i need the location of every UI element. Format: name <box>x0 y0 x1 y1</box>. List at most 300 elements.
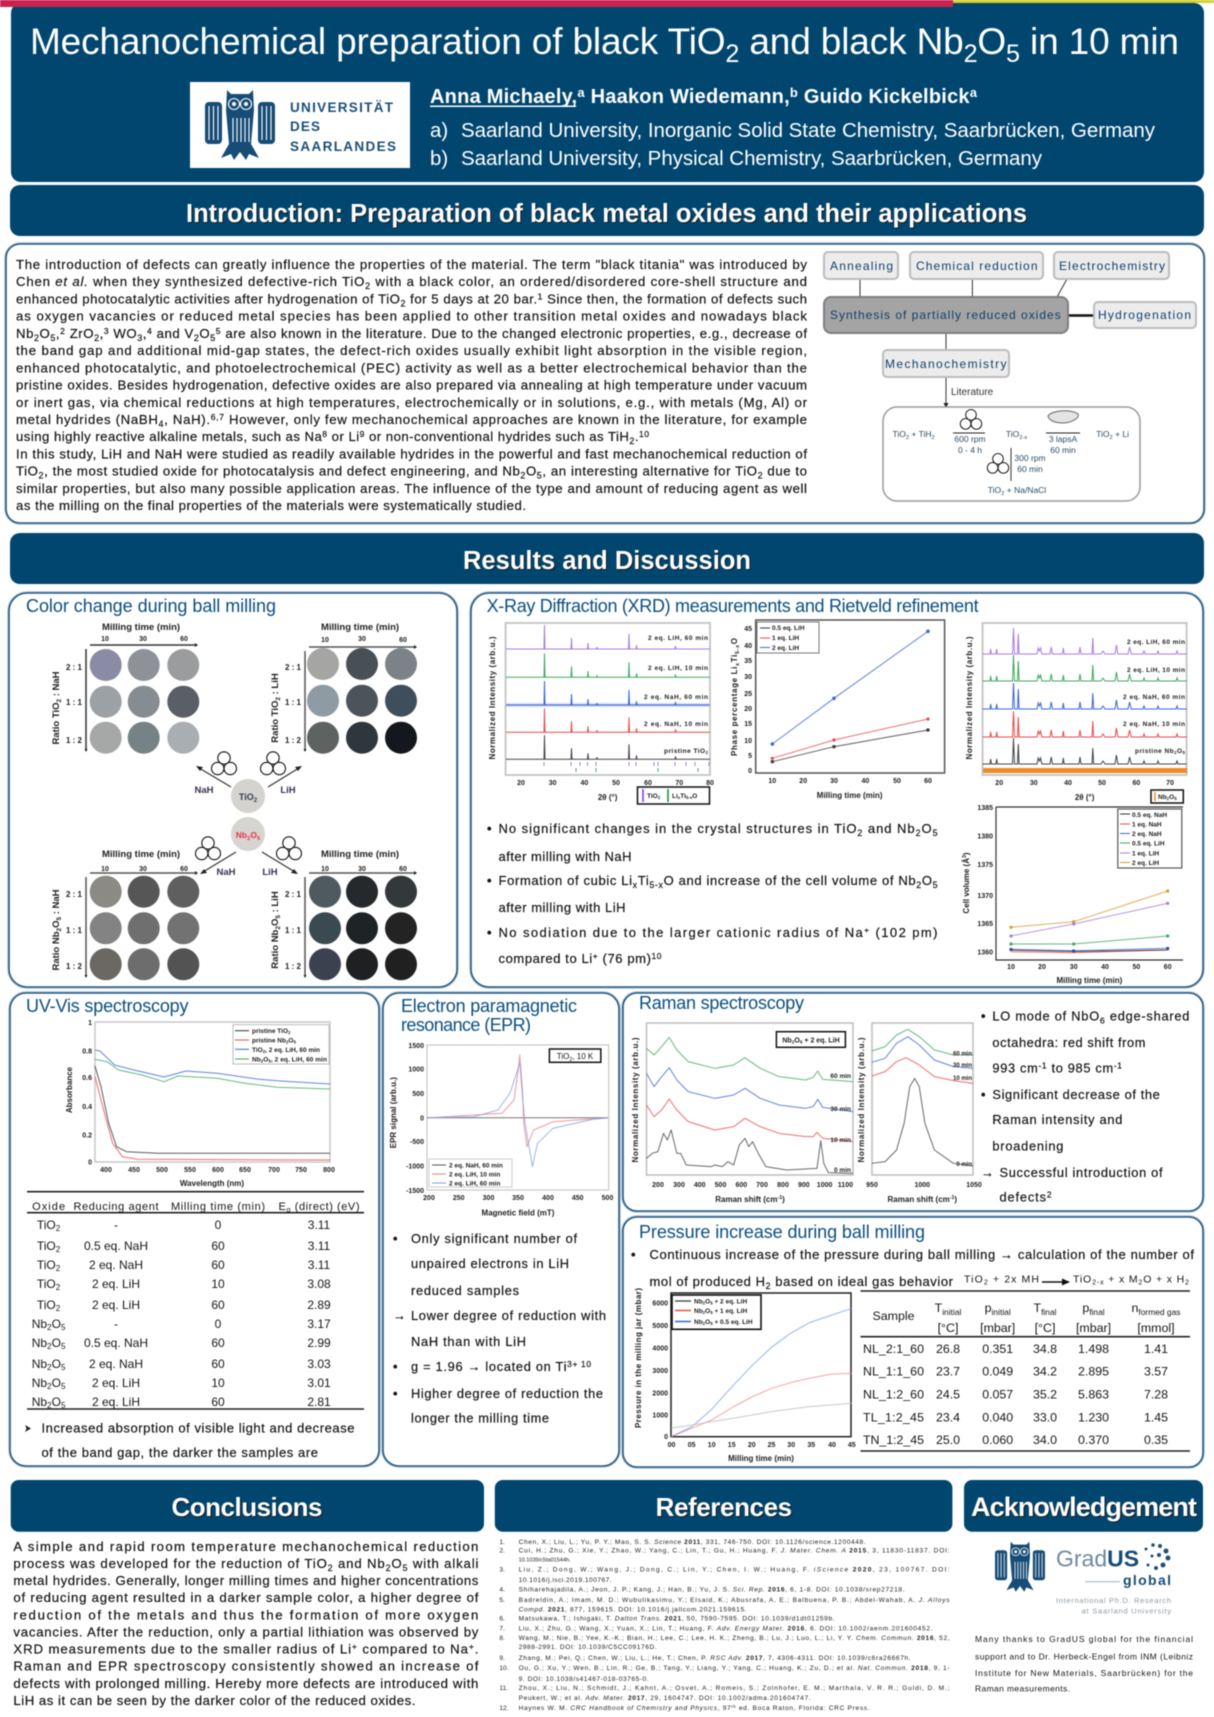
chart: EPR spectra: 1000 <box>408 1066 424 1073</box>
XRD findings: Formation of cubic LixTi5-xO and increase of the cell volume of Nb2O5 <box>498 873 938 890</box>
title: Mechanochemical preparation of black TiO2 and black Nb2O5 in 10 min <box>30 21 1179 68</box>
chart: absorbance spectra: 650 <box>239 1167 251 1174</box>
chart: cell volume: 1 eq. NaH <box>1132 822 1162 828</box>
reference list: Wang, M.; Nie, B.; Yee, K.-K.; Bian, H.; Lee, C.; Lee, H. K.; Zheng, B.; Lu, J.; Luo, L.; Li, Y. Y. Chem. Commun. 2016, 52, <box>519 1635 950 1642</box>
reference list: 7. <box>499 1626 505 1632</box>
table: band gaps: 60 <box>211 1239 225 1253</box>
pressure text: Continuous increase of the pressure during ball milling → calculation of the number of <box>650 1247 1194 1262</box>
chart: Raman spectra zoomed peak: Normalized Intensity (arb.u.) <box>857 1037 866 1162</box>
reference list: 9. DOI: 10.1038/s41467-018-03765-0. <box>519 1676 649 1683</box>
center: pristine samples and reaction arrows: TiO2 <box>239 792 258 804</box>
literature routes box: TiO2 + Na/NaCl <box>988 485 1046 497</box>
chart: absorbance spectra: 1 <box>88 1020 92 1027</box>
chart: pressure vs milling time: 1000 <box>652 1412 668 1420</box>
introduction text: or inert gas, via chemical reductions at high temperatures, electrochemically or in solutions, e.g., with metals (Mg, Al) or <box>16 395 808 410</box>
Raman findings: defects2 <box>1000 1190 1052 1205</box>
chart: Raman spectra zoomed peak: 950 <box>866 1182 878 1189</box>
literature routes box: 3 lapsA <box>1049 434 1078 444</box>
chart: cell volume: 10 <box>1007 964 1015 971</box>
table: pressure measurements: NL_1:1_60 <box>863 1364 924 1378</box>
chart: absorbance spectra: TiO2, 2 eq. LiH, 60 min <box>252 1047 320 1054</box>
reaction equation: TiO2-x + x M2O + x H2 <box>1073 1274 1189 1287</box>
chart: phase percentage vs milling time: 20 <box>744 706 752 713</box>
literature routes box <box>883 407 1140 501</box>
EPR findings: longer the milling time <box>411 1411 549 1426</box>
acknowledgement text: Raman measurements. <box>975 1684 1070 1694</box>
reference list: Compd. 2021, 877, 159615. DOI: 10.1016/j.jallcom.2021.159615. <box>519 1606 747 1614</box>
table: pressure measurements: pfinal <box>1082 1301 1105 1317</box>
panel: electron paramagnetic resonance <box>383 993 619 1466</box>
literature routes box: 300 rpm <box>1014 453 1046 463</box>
chart: cell volume: 2 eq. LiH <box>1132 860 1159 867</box>
reference list: 12. <box>499 1705 509 1712</box>
table: pressure measurements: NL_2:1_60 <box>863 1342 924 1356</box>
table: pressure measurements: 0.057 <box>982 1388 1013 1402</box>
introduction text: using highly reactive alkaline metals, such as Na8 or Li9 or non-conventional hydrides such as TiH2.10 <box>16 429 649 446</box>
table: pressure measurements: 23.4 <box>936 1410 960 1424</box>
Raman findings <box>981 1009 1189 1205</box>
chart: pressure vs milling time: 45 <box>848 1442 856 1449</box>
table: band gaps: Milling time (min) <box>171 1201 265 1213</box>
chart: cell volume: 1 eq. LiH <box>1132 850 1159 858</box>
section: conclusions: Conclusions <box>172 1492 322 1522</box>
reference list: 9. <box>499 1655 505 1662</box>
conclusions text: of reducing agent resulted in a darker sample color, a higher degree of <box>13 1590 479 1605</box>
reference list: Zhang, M.; Pei, Q.; Chen, W.; Liu, L.; He, T.; Chen, P. RSC Adv. 2017, 7, 4306-4311. DOI: 10.1039/c6ra26667h. <box>519 1655 911 1662</box>
flow diagram: routes to partially reduced oxides: Electrochemistry <box>1059 259 1165 273</box>
chart: TiO2 diffractograms: 60 <box>644 780 652 787</box>
logo: GradUS global: GradUS <box>1056 1546 1139 1572</box>
EPR findings: Higher degree of reduction the <box>411 1386 603 1401</box>
chart: absorbance spectra: 0.2 <box>82 1132 92 1140</box>
table: pressure measurements: 24.5 <box>936 1388 960 1402</box>
chart: phase percentage vs milling time: 0.5 eq. LiH <box>772 625 805 632</box>
table: pressure measurements: 5.863 <box>1078 1388 1109 1402</box>
chart: phase percentage vs milling time: 50 <box>893 778 901 785</box>
sample grid: TiO2 with NaH: 60 <box>180 636 188 643</box>
chart: absorbance spectra: 400 <box>100 1167 112 1174</box>
table: band gaps: 2 eq. LiH <box>92 1277 140 1291</box>
chart: EPR spectra <box>389 1043 613 1218</box>
table: pressure measurements: 33.0 <box>1033 1410 1057 1424</box>
sample grid: Nb2O5 with LiH: Ratio Nb2O5 : LiH <box>270 891 282 969</box>
reference list: Zhou, X.; Liu, N.; Schmidt, J.; Kahnt, A.; Osvet, A.; Romeis, S.; Zolnhofer, E. M.; Marthala, V. R. R.; Guldi, D. M.; <box>519 1685 950 1692</box>
flow diagram: routes to partially reduced oxides: Hydrogenation <box>1098 308 1191 322</box>
reference list: 2. <box>499 1548 505 1554</box>
table: pressure measurements: 1.41 <box>1144 1342 1168 1356</box>
chart: EPR spectra: 450 <box>572 1195 584 1202</box>
reference list: Peukert, W.; et al. Adv. Mater. 2017, 29, 1604747. DOI: 10.1002/adma.201604747. <box>519 1695 811 1702</box>
section: references <box>495 1480 952 1712</box>
chart: Raman spectra full range: 60 min <box>830 1073 851 1080</box>
chart: pressure vs milling time: 4000 <box>652 1346 668 1352</box>
center: pristine samples and reaction arrows: NaH <box>194 785 214 796</box>
chart: Raman spectra zoomed peak: 10 min <box>953 1076 972 1082</box>
chart: Raman spectra zoomed peak <box>857 1023 982 1204</box>
table: pressure measurements: [mbar] <box>1076 1321 1111 1335</box>
section: conclusions <box>11 1480 484 1708</box>
pressure text: • <box>631 1247 636 1262</box>
sample grid: TiO2 with NaH: 1 : 1 <box>66 698 83 707</box>
panel: color change during ball milling <box>9 593 457 987</box>
table: band gaps: 3.11 <box>308 1218 331 1232</box>
table: band gaps: 3.17 <box>307 1317 331 1331</box>
table: band gaps: - <box>114 1218 118 1232</box>
chart: pressure vs milling time: 0 <box>664 1434 668 1441</box>
chart: phase percentage vs milling time: 30 <box>744 674 752 681</box>
table: band gaps: 3.11 <box>308 1239 331 1253</box>
chart: pressure vs milling time: 05 <box>688 1442 696 1449</box>
table: pressure measurements: 34.8 <box>1033 1342 1057 1356</box>
EPR findings: Only significant number of <box>411 1231 577 1246</box>
reference list: 5. <box>499 1597 505 1604</box>
chart: EPR spectra: 250 <box>453 1195 465 1202</box>
chart: Raman spectra zoomed peak: 1050 <box>966 1182 982 1189</box>
flow diagram: routes to partially reduced oxides: Synthesis of partially reduced oxides <box>830 308 1061 322</box>
reference list: 10. <box>499 1665 509 1672</box>
reference list: 6. <box>499 1616 505 1622</box>
table: pressure measurements <box>860 1291 1190 1451</box>
Raman findings: octahedra: red shift from <box>992 1035 1145 1050</box>
chart: phase percentage vs milling time: 2 eq. LiH <box>772 645 799 652</box>
chart: cell volume: 0.5 eq. LiH <box>1132 840 1165 848</box>
chart: absorbance spectra: Wavelength (nm) <box>180 1179 244 1188</box>
chart: phase percentage vs milling time: 40 <box>862 778 869 785</box>
chart: EPR spectra: 2 eq. NaH, 60 min <box>449 1162 503 1170</box>
chart: pressure vs milling time: 2000 <box>652 1390 668 1398</box>
chart: absorbance spectra: 750 <box>295 1167 307 1174</box>
flow diagram: routes to partially reduced oxides: Mechanochemistry <box>885 357 1006 371</box>
chart: EPR spectra: 300 <box>483 1195 494 1202</box>
chart: cell volume: 1385 <box>977 805 993 812</box>
table: pressure measurements: pinitial <box>985 1301 1011 1317</box>
table: band gaps: TiO2 <box>37 1239 61 1254</box>
affiliations: a) <box>430 119 448 142</box>
logo: GradUS global: International Ph.D. Research <box>1056 1596 1171 1605</box>
reference list: 2988-2991. DOI: 10.1039/C5CC09176D. <box>519 1644 657 1651</box>
Raman findings: 993 cm-1 to 985 cm-1 <box>992 1061 1122 1076</box>
table: band gaps: 2.81 <box>307 1395 331 1409</box>
chart: absorbance spectra: 0.6 <box>82 1075 92 1082</box>
sample grid: TiO2 with LiH: 2 : 1 <box>285 663 302 672</box>
chart: cell volume: Milling time (min) <box>1057 976 1123 985</box>
chart: cell volume: 1365 <box>977 921 993 928</box>
literature routes box: 0 - 4 h <box>958 445 982 455</box>
chart: cell volume <box>962 805 1183 985</box>
Raman findings: • <box>981 1087 986 1102</box>
table: band gaps: 10 <box>211 1277 225 1291</box>
chart: Nb2O5 diffractograms: 60 <box>1133 780 1140 787</box>
table: band gaps: 2 eq. LiH <box>92 1395 140 1409</box>
flow diagram: routes to partially reduced oxides <box>824 252 1196 501</box>
XRD findings: • <box>487 925 492 940</box>
chart: Nb2O5 diffractograms: 2 eq. NaH, 60 min <box>1123 694 1185 701</box>
chart: Raman spectra zoomed peak: Raman shift (cm-1) <box>888 1195 957 1204</box>
chart: pressure vs milling time: 30 <box>787 1442 795 1449</box>
sample grid: Nb2O5 with LiH <box>270 849 417 980</box>
chart: EPR spectra: 200 <box>423 1195 435 1202</box>
table: pressure measurements: Tinitial <box>935 1301 962 1317</box>
chart: pressure vs milling time: 10 <box>708 1442 716 1449</box>
reference list: 1. <box>499 1539 505 1546</box>
table: band gaps: 0.5 eq. NaH <box>84 1239 148 1253</box>
chart: cell volume: 30 <box>1070 964 1078 971</box>
chart: TiO2 diffractograms: TiO2 <box>647 793 661 800</box>
XRD findings: compared to Li+ (76 pm)10 <box>498 951 662 966</box>
table: band gaps: Nb2O5 <box>32 1317 66 1332</box>
conclusions text: vacancies. After the reduction, only a partial lithiation was observed by <box>13 1624 479 1640</box>
reference list: 10.1016/j.isci.2019.100767. <box>519 1577 612 1584</box>
chart: absorbance spectra: 600 <box>212 1167 224 1174</box>
table: pressure measurements: 1.45 <box>1144 1410 1168 1424</box>
panel title: UV-Vis spectroscopy <box>26 996 188 1016</box>
introduction text: TiO2, the most studied oxide for photocatalysis and defect engineering, and Nb2O5, an interesting alternative for TiO2 due to <box>16 464 807 480</box>
table: band gaps: 2.89 <box>307 1298 331 1312</box>
chart: Raman spectra full range: 1000 <box>817 1182 832 1189</box>
chart: phase percentage vs milling time: 5 <box>748 753 752 760</box>
literature routes box: 600 rpm <box>954 434 986 444</box>
chart: Raman spectra zoomed peak: 30 min <box>953 1063 972 1069</box>
table: band gaps: Oxide <box>32 1201 65 1213</box>
chart: EPR spectra: 350 <box>512 1195 524 1202</box>
conclusions text <box>13 1539 479 1708</box>
panel title: X-Ray Diffraction (XRD) measurements and Rietveld refinement <box>487 596 979 616</box>
sample grid: Nb2O5 with LiH: 1 : 2 <box>285 962 302 971</box>
chart: Nb2O5 diffractograms: Normalized Intensity (arb.u.) <box>965 636 974 760</box>
chart: absorbance spectra: 450 <box>128 1167 140 1174</box>
chart: phase percentage vs milling time: 35 <box>744 658 752 665</box>
chart: pressure vs milling time: 20 <box>748 1442 756 1449</box>
chart: Raman spectra zoomed peak: 1000 <box>915 1182 930 1189</box>
XRD findings: • <box>487 821 492 836</box>
introduction text: as oxygen vacancies or reduced metal species has been applied to other transition metal oxides and nowadays black <box>16 308 807 324</box>
chart: EPR spectra: Magnetic field (mT) <box>482 1209 555 1218</box>
chart: cell volume: 2 eq. NaH <box>1132 831 1162 838</box>
chart: phase percentage vs milling time: 10 <box>768 778 776 785</box>
acknowledgement text: Many thanks to GradUS global for the financial <box>975 1634 1193 1644</box>
XRD findings: after milling with LiH <box>498 900 626 915</box>
sample grid: TiO2 with LiH <box>270 622 417 754</box>
table: pressure measurements: 35.2 <box>1033 1388 1057 1402</box>
section: acknowledgement <box>964 1480 1203 1694</box>
chart: absorbance spectra: 0 <box>88 1160 92 1166</box>
chart: EPR spectra: -500 <box>410 1139 424 1146</box>
sample grid: Nb2O5 with LiH: 30 <box>358 866 366 873</box>
chart: absorbance spectra: 700 <box>268 1167 280 1174</box>
chart: TiO2 diffractograms: 30 <box>549 780 557 787</box>
table: pressure measurements: 34.0 <box>1033 1433 1057 1447</box>
Raman findings: → <box>981 1165 994 1180</box>
table: band gaps: 60 <box>211 1298 225 1312</box>
chart: Raman spectra full range: 600 <box>735 1182 747 1189</box>
table: pressure measurements: 7.28 <box>1144 1388 1168 1402</box>
chart: phase percentage vs milling time: Phase percentage LixTi5-xO <box>730 638 741 756</box>
UV-Vis conclusion <box>25 1421 354 1460</box>
sample grid: TiO2 with NaH: Ratio TiO2 : NaH <box>51 671 63 745</box>
chart: EPR spectra: 2 eq. LiH, 10 min <box>449 1172 500 1178</box>
sample grid: TiO2 with NaH: 10 <box>101 636 109 643</box>
chart: TiO2 diffractograms: 2θ (°) <box>598 793 618 802</box>
conclusions text: LiH as it can be seen by the darker color of the reduced oxides. <box>13 1693 415 1708</box>
XRD findings: No sodiation due to the larger cationic radius of Na+ (102 pm) <box>498 925 938 940</box>
XRD findings <box>487 821 938 966</box>
panel: pressure increase during ball milling <box>623 1217 1203 1467</box>
table: pressure measurements: 0.060 <box>982 1433 1013 1447</box>
chart: Raman spectra full range: 0 min <box>834 1167 851 1174</box>
reference list: 3. <box>499 1566 505 1574</box>
chart: absorbance spectra: 0.4 <box>82 1104 92 1111</box>
chart: pressure vs milling time: 25 <box>768 1442 775 1449</box>
table: pressure measurements: 0.351 <box>982 1342 1013 1356</box>
chart: pressure vs milling time: 6000 <box>652 1300 668 1308</box>
chart: EPR spectra: -1000 <box>406 1164 424 1171</box>
chart: pressure vs milling time: 35 <box>807 1442 815 1449</box>
reference list: Matsukawa, T.; Ishigaki, T. Dalton Trans. 2021, 50, 7590-7595. DOI: 10.1039/d1dt01259b. <box>519 1616 835 1622</box>
chart: TiO2 diffractograms: LixTi5-xO <box>672 793 697 800</box>
table: band gaps: Eg (direct) (eV) <box>278 1201 360 1214</box>
panel title: Color change during ball milling <box>26 596 276 616</box>
introduction text: enhanced photocatalytic, and photoelectrochemical (PEC) activity as well as a better electrochemical behavior than the <box>16 360 807 376</box>
reference list <box>499 1539 950 1712</box>
section: acknowledgement: Acknowledgement <box>971 1492 1197 1522</box>
table: pressure measurements: nformed gas <box>1131 1301 1181 1317</box>
EPR findings: → <box>393 1308 406 1323</box>
table: pressure measurements: NL_1:2_60 <box>863 1388 924 1402</box>
introduction text: Chen et al. when they synthesized defective-rich TiO2 with a black color, an ordered/disordered core-shell structure and <box>16 274 807 291</box>
chart: pressure vs milling time: 3000 <box>652 1368 668 1375</box>
EPR findings <box>393 1231 606 1426</box>
chart: Raman spectra full range: Normalized Intensity (arb.u.) <box>631 1037 640 1162</box>
acknowledgement text: support and to Dr. Herbeck-Engel from INM (Leibniz <box>975 1651 1193 1661</box>
chart: absorbance spectra: 550 <box>184 1167 196 1174</box>
chart: Nb2O5 diffractograms: 20 <box>995 780 1003 787</box>
chart: phase percentage vs milling time: 25 <box>744 691 752 698</box>
chart: Raman spectra full range <box>631 1023 853 1204</box>
XRD findings: No significant changes in the crystal structures in TiO2 and Nb2O5 <box>498 821 938 838</box>
chart: TiO2 diffractograms: Normalized Intensity (arb.u.) <box>488 636 497 760</box>
sample grid: TiO2 with NaH: 30 <box>139 636 147 643</box>
table: band gaps: 2 eq. LiH <box>92 1376 140 1390</box>
chart: cell volume: 40 <box>1101 964 1109 971</box>
table: pressure measurements: Sample <box>872 1309 915 1323</box>
sample grid: TiO2 with LiH: 10 <box>321 637 329 644</box>
table: band gaps: 0.5 eq. NaH <box>84 1336 148 1350</box>
table: band gaps: Nb2O5 <box>32 1357 66 1372</box>
table: band gaps: Reducing agent <box>74 1201 158 1213</box>
reference list: 11. <box>499 1685 508 1692</box>
chart: absorbance spectra: pristine TiO2 <box>252 1028 291 1035</box>
Raman findings: • <box>981 1009 986 1024</box>
affiliations: b) <box>430 147 448 170</box>
chart: EPR spectra: EPR signal (arb.u.) <box>389 1077 398 1148</box>
table: band gaps: 0 <box>215 1317 222 1331</box>
chart: pressure vs milling time <box>634 1288 856 1463</box>
table: band gaps: 10 <box>211 1376 225 1390</box>
table: pressure measurements: 3.57 <box>1144 1364 1168 1378</box>
chart: phase percentage vs milling time: 10 <box>744 738 752 745</box>
conclusions text: XRD measurements due to the smaller radius of Li+ compared to Na+. <box>13 1641 478 1656</box>
chart: pressure vs milling time: 5000 <box>652 1323 668 1330</box>
table: band gaps: TiO2 <box>37 1218 61 1233</box>
chart: cell volume: 1370 <box>977 893 993 900</box>
chart: pressure vs milling time: Nb2O5 + 2 eq. LiH <box>694 1298 747 1306</box>
sample grid: TiO2 with LiH: 30 <box>358 636 366 643</box>
table: pressure measurements: 0.049 <box>982 1364 1013 1378</box>
Raman findings: Raman intensity and <box>992 1112 1122 1127</box>
chart: cell volume: 0.5 eq. NaH <box>1132 812 1167 819</box>
acknowledgement text: Institute for New Materials, Saarbrücken) for the <box>975 1668 1193 1678</box>
affiliations: Saarland University, Inorganic Solid State Chemistry, Saarbrücken, Germany <box>461 119 1156 142</box>
section bar: results and discussion: Results and Discussion <box>463 547 751 575</box>
chart: absorbance spectra: 500 <box>156 1167 168 1174</box>
sample grid: TiO2 with LiH: 60 <box>399 637 407 644</box>
chart: Raman spectra full range: 700 <box>756 1182 768 1189</box>
chart: Raman spectra zoomed peak: 0 min <box>956 1162 972 1168</box>
sample grid: Nb2O5 with NaH: Milling time (min) <box>102 849 180 860</box>
top accent bars <box>0 0 1214 7</box>
reference list: Liu, Z.; Dong, W.; Wang, J.; Dong, C.; Lin, Y.; Chen, I. W.; Huang, F. iScience 2020, 23, 100767. DOI: <box>519 1566 950 1574</box>
introduction text: as the milling on the final properties of the materials were systematically studied. <box>16 498 526 513</box>
panel title: Raman spectroscopy <box>639 993 804 1013</box>
chart: TiO2 diffractograms: pristine TiO2 <box>664 748 709 755</box>
table: band gaps: TiO2 <box>37 1277 61 1292</box>
sample grid: Nb2O5 with LiH: 1 : 1 <box>285 926 302 935</box>
reaction equation <box>964 1274 1189 1287</box>
chart: Raman spectra full range: 1100 <box>838 1182 853 1189</box>
chart: phase percentage vs milling time: 40 <box>744 643 752 650</box>
table: pressure measurements: TN_1:2_45 <box>863 1433 924 1447</box>
table: band gaps: 60 <box>211 1395 225 1409</box>
sample grid: TiO2 with NaH: 2 : 1 <box>66 663 83 672</box>
XRD findings: after milling with NaH <box>498 849 632 864</box>
chart: cell volume: 60 <box>1164 964 1172 971</box>
logo: GradUS global: at Saarland University <box>1082 1606 1171 1616</box>
sample grid: TiO2 with NaH: 1 : 2 <box>66 736 83 745</box>
literature routes box: 60 min <box>1050 445 1076 455</box>
panel: Raman spectroscopy <box>623 993 1203 1211</box>
table: band gaps: 3.08 <box>307 1277 331 1291</box>
chart: phase percentage vs milling time: 30 <box>830 778 838 785</box>
sample grid: Nb2O5 with LiH: 10 <box>321 866 329 873</box>
section bar: introduction: Introduction: Preparation of black metal oxides and their applications <box>186 200 1027 228</box>
EPR findings: • <box>393 1359 398 1374</box>
reference list: Liu, X.; Zhu, G.; Wang, X.; Yuan, X.; Lin, T.; Huang, F. Adv. Energy Mater. 2016, 6. DOI: 10.1002/aenm.201600452. <box>519 1626 933 1632</box>
chart: TiO2 diffractograms: 40 <box>581 780 588 787</box>
reference list: Cui, H.; Zhu, G.; Xie, Y.; Zhao, W.; Yang, C.; Lin, T.; Gu, H.; Huang, F. J. Mater. Chem. A 2015, 3, 11830-11837. DOI: <box>519 1548 950 1554</box>
chart: pressure vs milling time: 40 <box>828 1442 836 1449</box>
conclusions text: reduction of the metals and thus the formation of more oxygen <box>13 1608 478 1622</box>
flow diagram: routes to partially reduced oxides: Literature <box>951 387 994 398</box>
table: pressure measurements: 23.7 <box>936 1364 960 1378</box>
table: band gaps: Nb2O5 <box>32 1395 66 1410</box>
EPR findings: NaH than with LiH <box>411 1334 526 1349</box>
introduction text: In this study, LiH and NaH were studied as readily available hydrides in the powerful and fast mechanochemical reduction of <box>16 446 807 462</box>
sample grid: Nb2O5 with NaH: 2 : 1 <box>66 890 83 899</box>
center: pristine samples and reaction arrows: LiH <box>262 867 278 878</box>
sample grid: TiO2 with NaH <box>51 622 199 754</box>
chart: EPR spectra: 1500 <box>408 1043 424 1050</box>
introduction text: The introduction of defects can greatly influence the properties of the material. The term "black titania" was introduced by <box>16 257 807 272</box>
chart: Nb2O5 diffractograms: Nb2O5 <box>1158 794 1177 801</box>
header banner <box>11 3 1204 182</box>
table: pressure measurements: 1.230 <box>1078 1410 1109 1424</box>
conclusions text: A simple and rapid room temperature mechanochemical reduction <box>13 1539 478 1554</box>
table: band gaps <box>27 1192 364 1410</box>
table: band gaps: 60 <box>211 1357 225 1371</box>
chart: Raman spectra full range: 10 min <box>830 1137 851 1144</box>
section bar: introduction <box>10 185 1204 236</box>
logo: Universität des Saarlandes: UNIVERSITÄT <box>290 100 394 115</box>
